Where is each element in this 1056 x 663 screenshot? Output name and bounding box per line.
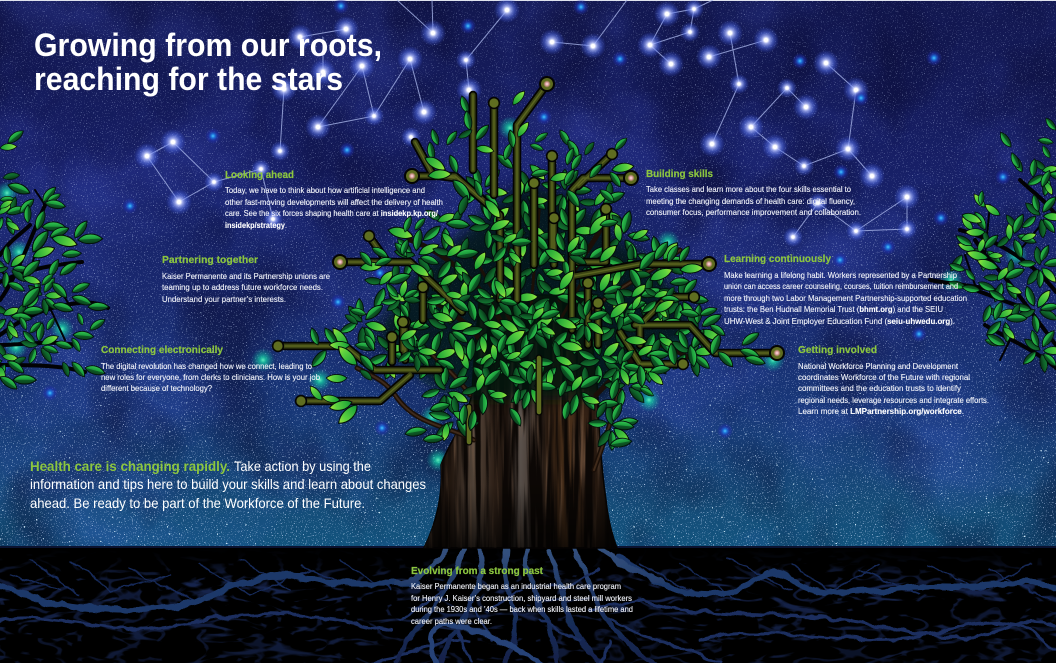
text block: Evolving from a strong past: Evolving from a strong past	[411, 565, 543, 577]
text block: Getting involved: National Workforce Planning and Development	[798, 361, 959, 371]
text block: Getting involved	[798, 344, 989, 416]
title	[34, 27, 382, 97]
tree trunk	[420, 290, 620, 550]
callout: health care is changing rapidly	[30, 458, 426, 511]
callout: health care is changing rapidly: information and tips here to build your skills and learn about changes	[30, 476, 426, 492]
text block: Looking ahead: care. See the six forces shaping health care at insidekp.kp.org/	[225, 208, 439, 218]
text block: Evolving from a strong past	[411, 565, 633, 626]
text block: Evolving from a strong past: during the 1930s and ’40s — back when skills lasted a lifetime and	[411, 604, 633, 614]
canopy leaf clusters	[332, 158, 735, 460]
upper canopy leaf clusters over branches	[373, 215, 686, 391]
text block: Evolving from a strong past: career paths were clear.	[411, 616, 492, 626]
text block: Building skills: consumer focus, performance improvement and collaboration.	[646, 207, 861, 217]
right tree branches	[930, 180, 1056, 368]
text block: Connecting electronically: different because of technology?	[101, 383, 212, 393]
text block: Connecting electronically: The digital revolution has changed how we connect, leading to	[101, 361, 312, 371]
circuit-style branches	[272, 76, 785, 407]
text block: Looking ahead: other fast-moving developments will affect the delivery of health	[225, 197, 443, 207]
central tree leaves	[307, 89, 766, 449]
constellations	[134, 0, 920, 247]
callout: health care is changing rapidly: Health care is changing rapidly.	[30, 458, 230, 474]
text block: Learning continuously: trusts: the Ben Hudnall Memorial Trust (bhmt.org) and the SEIU	[724, 304, 943, 314]
text block: Partnering together: Understand your partner’s interests.	[162, 294, 286, 304]
text block: Building skills: meeting the changing demands of health care: digital fluency,	[646, 196, 855, 206]
left tree branches	[0, 190, 108, 372]
fireflies	[0, 116, 1028, 472]
text block: Building skills: Building skills	[646, 168, 713, 180]
callout: health care is changing rapidly: Take action by using the	[234, 458, 371, 474]
circuit nodes	[272, 76, 785, 407]
text block: Learning continuously: union can access career counseling, courses, tuition reimbursement and	[724, 281, 958, 291]
text block: Looking ahead: insidekp/strategy.	[225, 220, 287, 230]
callout: health care is changing rapidly: ahead. Be ready to be part of the Workforce of the Future.	[30, 495, 365, 511]
roots underground	[0, 546, 1056, 663]
text block: Getting involved: Learn more at LMPartnership.org/workforce.	[798, 406, 964, 416]
title: Growing from our roots,	[34, 27, 382, 63]
organic brown branches	[357, 150, 700, 470]
text block: Building skills: Take classes and learn more about the four skills essential to	[646, 184, 851, 194]
text block: Learning continuously: more through two Labor Management Partnership-supported education	[724, 293, 967, 303]
text block: Learning continuously: Make learning a lifelong habit. Workers represented by a Partnership	[724, 270, 957, 280]
text block: Building skills	[646, 168, 861, 217]
text block: Looking ahead	[225, 169, 443, 230]
text block: Getting involved: coordinates Workforce of the Future with regional	[798, 372, 970, 382]
text block: Learning continuously: Learning continuously	[724, 253, 831, 265]
text block: Learning continuously	[724, 253, 967, 326]
right tree	[930, 116, 1056, 377]
text block: Partnering together: Kaiser Permanente and its Partnership unions are	[162, 271, 330, 281]
dim blue stars	[0, 0, 1011, 439]
text block: Looking ahead: Looking ahead	[225, 169, 294, 181]
trunk circuit stems	[469, 358, 539, 442]
text block: Connecting electronically: Connecting electronically	[101, 344, 223, 356]
left tree	[0, 128, 109, 392]
text block: Partnering together: teaming up to address future workforce needs.	[162, 282, 323, 292]
text block: Partnering together	[162, 254, 330, 304]
text block: Connecting electronically: new roles for everyone, from clerks to clinicians. How is your job	[101, 372, 320, 382]
text block: Looking ahead: Today, we have to think about how artificial intelligence and	[225, 185, 425, 195]
text block: Getting involved: Getting involved	[798, 344, 877, 356]
title: reaching for the stars	[34, 61, 343, 97]
text block: Connecting electronically	[101, 344, 320, 393]
text block: Evolving from a strong past: for Henry J. Kaiser’s construction, shipyard and steel mill workers	[411, 593, 632, 603]
text block: Learning continuously: UHW-West & Joint Employer Education Fund (seiu-uhwedu.org).	[724, 316, 955, 326]
canopy shadow mass	[375, 185, 695, 400]
text block: Partnering together: Partnering together	[162, 254, 258, 266]
text block: Evolving from a strong past: Kaiser Permanente began as an industrial health care program	[411, 581, 621, 591]
text block: Getting involved: committees and the education trusts to identify	[798, 383, 962, 393]
text block: Getting involved: regional needs, leverage resources and integrate efforts.	[798, 395, 989, 405]
